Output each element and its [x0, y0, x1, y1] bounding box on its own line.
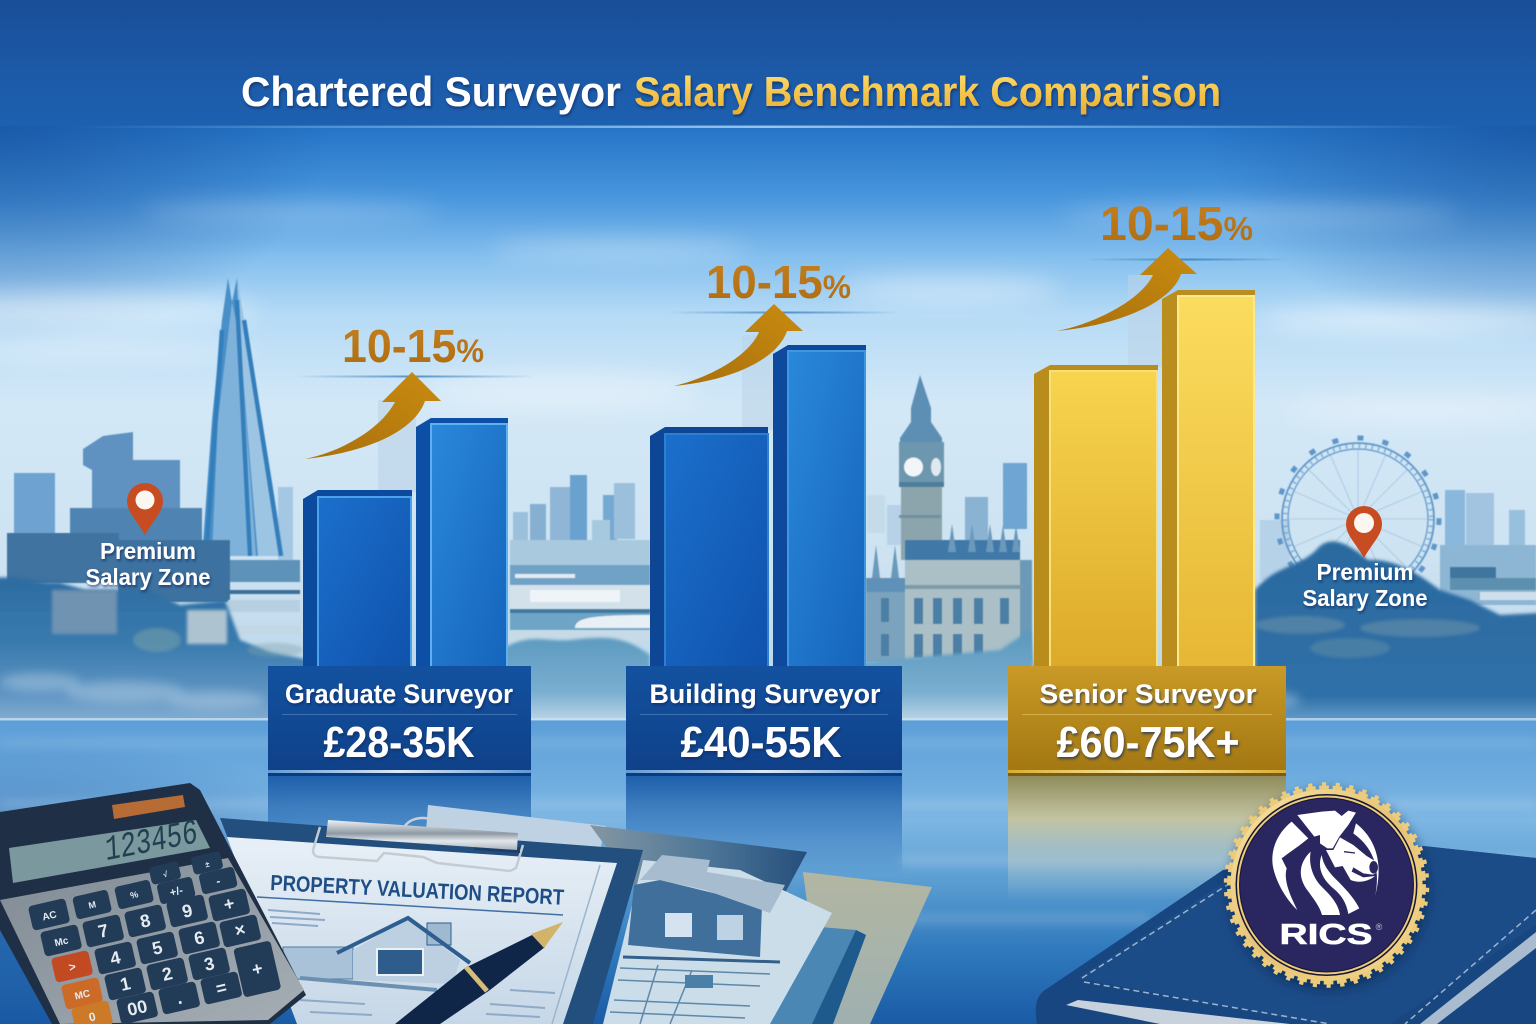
salary plate: Building Surveyor — [626, 666, 902, 776]
percentage label: Senior: 10-15% — [1100, 198, 1253, 251]
calculator body — [0, 783, 306, 1024]
registered mark: ® — [1376, 922, 1383, 932]
calculator keys: 6 — [192, 927, 206, 949]
pen — [395, 922, 563, 1024]
skyline: Big Ben and Palace of Westminster — [866, 375, 1032, 662]
bar group: Graduate Surveyor — [303, 400, 508, 668]
skyline: centre — [510, 475, 650, 642]
skyline: left with Shard — [7, 278, 300, 634]
sky corner shading — [0, 0, 1536, 346]
teal folder — [770, 927, 866, 1024]
growth indicator: Graduate — [295, 320, 535, 459]
calculator keys: √ — [162, 869, 169, 879]
RICS wordmark: RICS — [1280, 919, 1372, 951]
calculator keys: 5 — [150, 937, 164, 959]
label: premium salary zone left: Salary Zone — [86, 564, 210, 590]
calculator keys: 9 — [180, 900, 194, 922]
calculator keys: . — [175, 988, 184, 1008]
role label: Senior Surveyor — [1040, 679, 1257, 709]
icon: map pin left — [127, 483, 163, 535]
calculator keys: M — [87, 899, 97, 911]
report heading: PROPERTY VALUATION REPORT — [270, 870, 565, 910]
calculator keys: 7 — [96, 920, 110, 942]
calculator keys: 2 — [160, 963, 174, 985]
salary value: £28-35K — [324, 718, 475, 767]
heading rule — [257, 897, 563, 915]
calculator keys: + — [222, 893, 236, 915]
calculator keys: 1 — [118, 973, 132, 995]
skyline: right with London Eye — [1260, 438, 1536, 605]
calculator keys: Mc — [54, 935, 70, 949]
percentage label: Graduate: 10-15% — [342, 320, 484, 372]
icon: palace building — [866, 524, 1032, 662]
salary plate: Graduate Surveyor — [268, 666, 531, 776]
calculator keys: × — [233, 919, 247, 941]
report paper — [227, 837, 617, 1024]
arrow: Building — [674, 304, 803, 386]
percentage label: Building: 10-15% — [706, 256, 851, 308]
bar: building upper — [773, 345, 866, 668]
light top sheet — [426, 805, 606, 850]
report house illustration — [283, 918, 470, 990]
tree line — [0, 542, 1536, 730]
bar: graduate upper — [416, 418, 508, 668]
role label: Building Surveyor — [650, 679, 881, 709]
calculator keys: = — [214, 977, 229, 999]
arrow: Graduate — [305, 372, 441, 459]
top banner with hairline — [0, 0, 1536, 128]
calculator keys: % — [129, 889, 139, 901]
water shading left — [0, 730, 380, 1024]
blueprint sheet — [603, 855, 832, 1024]
horizon line — [0, 718, 1536, 720]
calculator keys: ± — [204, 859, 211, 869]
clouds — [0, 204, 1536, 424]
bar group: Senior Surveyor — [1034, 275, 1255, 668]
title — [241, 68, 1221, 115]
calculator keys: 3 — [202, 953, 216, 975]
calculator keys: 00 — [125, 996, 149, 1020]
trees: behind palace — [860, 630, 1040, 730]
seal gold scalloped edge — [1226, 784, 1428, 986]
calculator keys: + — [250, 958, 265, 980]
icon: Big Ben tower — [899, 375, 944, 560]
grey folder — [590, 825, 807, 893]
display digits: 123456 — [101, 814, 201, 871]
mist over trees — [0, 673, 1300, 709]
report body lines — [268, 910, 555, 1017]
label: premium salary zone left — [86, 538, 210, 590]
calculator keys: - — [215, 874, 222, 888]
growth indicator: Senior — [1057, 198, 1290, 331]
clipboard board — [220, 818, 643, 1024]
callout: premium salary zone left — [86, 483, 210, 590]
calculator keys: AC — [41, 909, 58, 923]
bar: senior lower — [1034, 365, 1158, 668]
bar: building lower — [650, 427, 768, 668]
clipboard with property valuation report — [220, 818, 643, 1024]
solar strip — [112, 795, 185, 819]
tan paper — [803, 872, 932, 1024]
salary value: £40-55K — [680, 718, 842, 767]
salary plate: Senior Surveyor — [1008, 666, 1286, 776]
trees: right — [1255, 542, 1536, 730]
display — [9, 820, 210, 883]
trees: left — [0, 577, 310, 730]
label: premium salary zone right — [1302, 559, 1428, 611]
arrow: Senior — [1057, 248, 1197, 331]
calculator keys: MC — [74, 988, 91, 1003]
leather notebook — [1036, 846, 1536, 1024]
water surface — [0, 720, 1536, 1024]
callout: premium salary zone right — [1302, 506, 1428, 611]
calculator keys: +/- — [169, 885, 185, 899]
title: gold part: Salary Benchmark Comparison — [634, 68, 1221, 115]
label: premium salary zone right: Premium — [1316, 559, 1414, 585]
icon: map pin right — [1346, 506, 1382, 558]
trees: centre — [500, 638, 650, 730]
icon: London Eye — [1277, 438, 1439, 600]
keypad plate — [0, 858, 304, 1024]
seal rings — [1236, 794, 1418, 976]
back documents — [426, 805, 932, 1024]
label: premium salary zone left: Premium — [100, 538, 196, 564]
salary value: £60-75K+ — [1056, 718, 1240, 767]
calculator keys — [28, 851, 281, 1024]
calculator keys: 8 — [138, 910, 152, 932]
role label: Graduate Surveyor — [285, 679, 513, 709]
water ripple bands — [0, 740, 1536, 923]
clipboard clip — [313, 818, 523, 871]
label: premium salary zone right: Salary Zone — [1302, 585, 1428, 611]
title: white part: Chartered Surveyor — [241, 68, 621, 115]
bar: senior upper — [1162, 290, 1255, 668]
reflections under plates — [268, 775, 1286, 900]
bar group: Building Surveyor — [650, 335, 866, 668]
bar: graduate lower — [303, 490, 412, 668]
calculator keys: > — [67, 959, 77, 975]
growth indicator: Building — [670, 256, 900, 386]
RICS seal badge — [1226, 784, 1428, 986]
background sky — [0, 126, 1536, 726]
RICS lion emblem — [1272, 811, 1379, 915]
tree foliage highlights — [52, 590, 1480, 658]
calculator — [0, 783, 306, 1024]
icon: Shard tower — [202, 278, 284, 556]
calculator keys: 4 — [108, 947, 122, 969]
